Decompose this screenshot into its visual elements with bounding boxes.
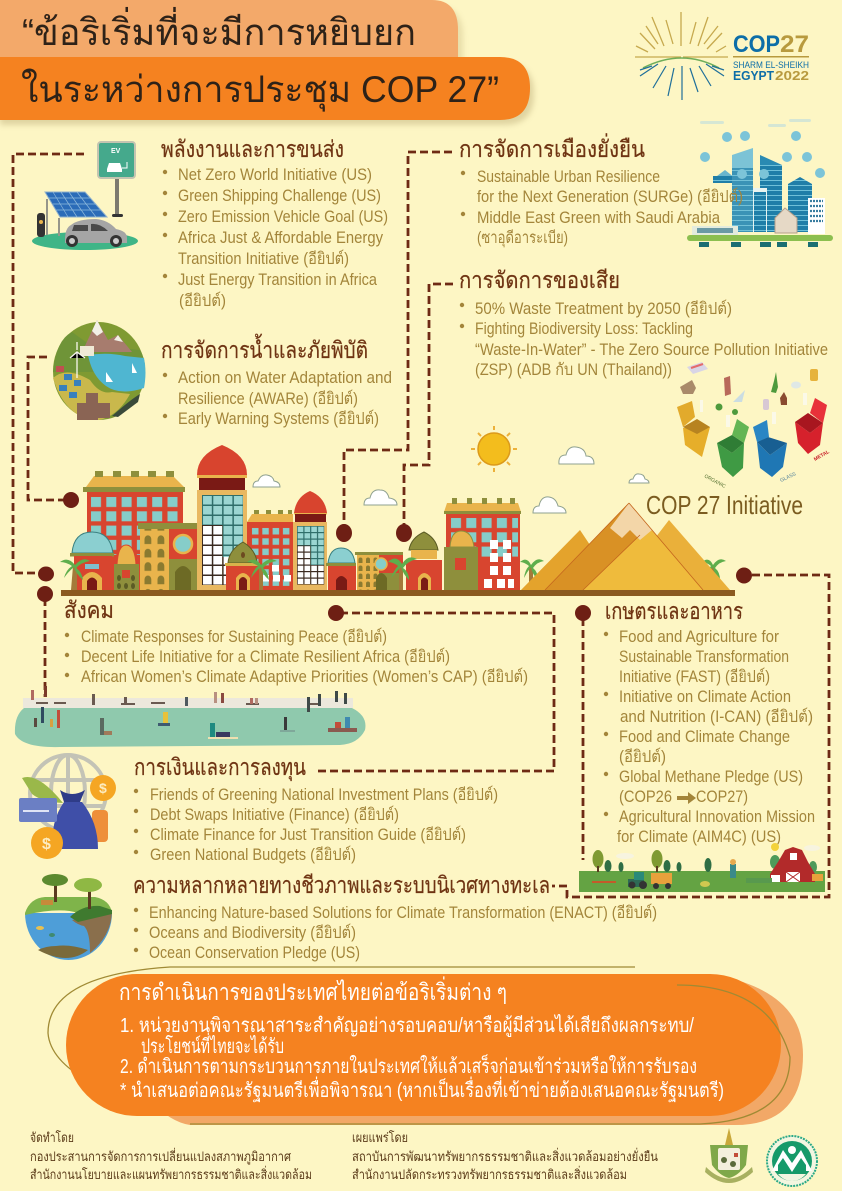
footer: published by: สำนักงานปลัดกระทรวงทรัพยากรธรรมชาติและสิ่งแวดล้อม [352, 1166, 627, 1182]
bullet list: agriculture: Global Methane Pledge (US) [619, 768, 803, 786]
bullet list: biodiversity: Oceans and Biodiversity (อียิปต์) [149, 923, 356, 942]
heading: agriculture: เกษตรและอาหาร [605, 598, 743, 624]
bullet list: agriculture [604, 628, 815, 846]
connector: urban [344, 152, 452, 526]
bullet list: energy: (อียิปต์) [179, 291, 226, 310]
bullet list: waste [460, 299, 828, 379]
logo: green circle [767, 1136, 817, 1186]
connector: agriculture [582, 618, 584, 860]
logo: COP27: SHARM EL-SHEIKH [733, 60, 809, 70]
bullet list: agriculture: Food and Agriculture for [619, 628, 779, 646]
node: agriculture [575, 605, 591, 621]
bullet list: finance: Green National Budgets (อียิปต์) [150, 845, 356, 864]
bullet list: society: African Women’s Climate Adaptive Priorities (Women’s CAP) (อียิปต์) [81, 667, 528, 686]
panel: Thailand actions [48, 967, 803, 1125]
upper promenade figures [31, 686, 347, 712]
panel: biodiversity [133, 872, 657, 962]
text block: actions [120, 1014, 724, 1102]
footer: prepared by [30, 1130, 312, 1182]
panel: agriculture and food [604, 598, 815, 846]
yellow bin [677, 401, 710, 457]
connector: biodiversity [552, 575, 829, 897]
bullet list: finance: Climate Finance for Just Transition Guide (อียิปต์) [150, 825, 466, 844]
connector: society [44, 598, 46, 697]
ground [61, 590, 735, 596]
pyramids [521, 503, 730, 590]
green bin [703, 419, 749, 490]
bullet list: biodiversity: Ocean Conservation Pledge (US) [149, 944, 360, 962]
heading: finance: การเงินและการลงทุน [134, 754, 306, 781]
bullet list: energy: Transition Initiative (อียิปต์) [178, 249, 349, 268]
building: small dome mosque [225, 542, 260, 590]
heading: energy: พลังงานและการขนส่ง [161, 136, 344, 162]
icon: EV solar charger: EV [111, 148, 121, 155]
bullet list: water: Action on Water Adaptation and [178, 369, 392, 387]
panel: society [64, 597, 528, 686]
illustration: people in park [15, 686, 365, 747]
connector: water [28, 357, 64, 500]
illustration: sun [471, 426, 517, 472]
red bin [795, 398, 831, 463]
icon: biodiversity globe [25, 874, 112, 960]
node: society [37, 586, 53, 602]
bullet list: agriculture: Initiative on Climate Action [619, 688, 791, 706]
building: teal domed tower [293, 491, 327, 590]
icon: smart city [687, 119, 833, 247]
bullet list: urban: Middle East Green with Saudi Arabia [477, 209, 721, 227]
bullet list: waste: (ZSP) (ADB กับ UN (Thailand)) [475, 361, 672, 379]
blue bin [753, 420, 798, 484]
palms [60, 557, 726, 590]
node: urban [336, 524, 352, 542]
bullet list: society: Climate Responses for Sustaining Peace (อียิปต์) [81, 627, 387, 646]
red bin: METAL [813, 449, 831, 463]
node: waste [396, 524, 412, 542]
connector: finance [317, 613, 554, 771]
building: olive mosque [406, 532, 442, 590]
logo: COP27: COP [733, 31, 780, 58]
panel: finance [134, 754, 498, 864]
falling waste [680, 362, 818, 427]
bullet list: finance [134, 785, 498, 864]
building: left domes [70, 532, 139, 590]
heading: waste: การจัดการของเสีย [459, 267, 620, 293]
bullet list: urban: (ซาอุดีอาระเบีย) [477, 229, 568, 248]
text block: actions: ประโยชน์ที่ไทยจะได้รับ [141, 1032, 284, 1058]
icon: finance globe and money bag: $ [99, 780, 107, 796]
lawn figures [34, 707, 357, 739]
label: COP 27 Initiative: COP 27 Initiative [646, 490, 803, 520]
bullet list: finance: Debt Swaps Initiative (Finance) (อียิปต์) [150, 805, 399, 824]
illustration: farm [579, 843, 825, 892]
footer: published by: สถาบันการพัฒนาทรัพยากรธรรมชาติและสิ่งแวดล้อมอย่างยั่งยืน [352, 1148, 658, 1164]
text block: actions: * นำเสนอต่อคณะรัฐมนตรีเพื่อพิจารณา (หากเป็นเรื่องที่เข้าข่ายต้องเสนอคณะรัฐมนตรี) [120, 1076, 724, 1102]
node: energy [38, 566, 54, 582]
text block: actions: 1. หน่วยงานพิจารณาสาระสำคัญอย่างรอบคอบ/หารือผู้มีส่วนได้เสียถึงผลกระทบ/ [120, 1014, 694, 1038]
building: tall domed tower [197, 445, 247, 590]
heading: society: สังคม [64, 597, 114, 623]
title banner: “ข้อริเริ่มที่จะมีการหยิบยก [22, 6, 416, 53]
footer: prepared by: สำนักงานนโยบายและแผนทรัพยากรธรรมชาติและสิ่งแวดล้อม [30, 1166, 312, 1182]
bullet list: society: Decent Life Initiative for a Climate Resilient Africa (อียิปต์) [81, 647, 450, 666]
bullet list: energy: Zero Emission Vehicle Goal (US) [178, 208, 388, 226]
connector: energy [13, 154, 84, 573]
bullet list: urban: for the Next Generation (SURGe) (อียิปต์) [477, 187, 743, 206]
connector: waste [404, 284, 453, 526]
illustration: clouds [253, 447, 649, 513]
title banner: ในระหว่างการประชุม COP 27” [21, 68, 499, 112]
heading: actions: การดำเนินการของประเทศไทยต่อข้อริเริ่มต่าง ๆ [119, 976, 507, 1005]
bullet list: energy: Just Energy Transition in Africa [178, 271, 378, 289]
footer: prepared by: กองประสานการจัดการการเปลี่ยนแปลงสภาพภูมิอากาศ [30, 1148, 292, 1165]
bullet list: water: Early Warning Systems (อียิปต์) [178, 409, 379, 428]
building: red grid block [247, 510, 293, 590]
footer: published by: เผยแพร่โดย [352, 1130, 408, 1145]
icon: water landscape [53, 320, 146, 420]
panel: energy and transport [161, 136, 388, 310]
building: centre low block [326, 548, 403, 590]
bullet list: waste: 50% Waste Treatment by 2050 (อียิปต์) [475, 299, 732, 318]
node: finance [328, 605, 344, 621]
bullet list: water: Resilience (AWARe) (อียิปต์) [178, 389, 358, 408]
bullet list: waste: Fighting Biodiversity Loss: Tackling [475, 320, 693, 338]
bullet list: agriculture: COP27) [696, 788, 748, 806]
bullet list: agriculture: Sustainable Transformation [619, 648, 789, 666]
logo: COP27: 27 [780, 31, 809, 58]
bullet list: energy [163, 166, 388, 310]
heading: biodiversity: ความหลากหลายทางชีวภาพและระบบนิเวศทางทะเล [133, 872, 550, 898]
panel: waste management [459, 267, 828, 379]
panel: water and disaster [161, 334, 392, 428]
bullet list: agriculture: (COP26 [619, 788, 672, 806]
icon: recycling bins [677, 362, 831, 490]
bullet list: agriculture: and Nutrition (I-CAN) (อียิปต์) [620, 707, 813, 726]
logo: COP27: EGYPT [733, 69, 774, 83]
heading: water: การจัดการน้ำและภัยพิบัติ [161, 334, 368, 363]
bullet list: energy: Net Zero World Initiative (US) [178, 166, 372, 184]
building: yellow arch block [138, 523, 197, 590]
bullet list: agriculture: Agricultural Innovation Mission [619, 808, 815, 826]
logo: COP27: 2022 [775, 69, 809, 83]
building: right red block [444, 498, 521, 590]
icon: finance globe and money bag [19, 755, 116, 859]
bullet list: agriculture: (อียิปต์) [619, 747, 666, 766]
footer: published by [352, 1130, 658, 1182]
building: red block [83, 471, 185, 590]
callout shape [48, 967, 803, 1125]
bullet list: agriculture: Food and Climate Change [619, 728, 790, 746]
bullet list: biodiversity: Enhancing Nature-based Solutions for Climate Transformation (ENACT) (อียิปต์) [149, 903, 657, 922]
bullet list: society [65, 627, 528, 686]
blue bin: GLASS [779, 471, 798, 484]
bullet list: energy: Africa Just & Affordable Energy [178, 229, 384, 247]
bullet list: urban: Sustainable Urban Resilience [477, 168, 660, 186]
logo: COP27 [635, 12, 809, 100]
bullet list: biodiversity [134, 903, 657, 962]
icon: finance globe and money bag: $ [42, 836, 51, 853]
title banner [0, 0, 534, 125]
panel: urban management [459, 133, 743, 248]
bullet list: energy: Green Shipping Challenge (US) [178, 187, 381, 205]
heading: urban: การจัดการเมืองยั่งยืน [459, 133, 645, 162]
text block: actions: 2. ดำเนินการตามกระบวนการภายในประเทศให้แล้วเสร็จก่อนเข้าร่วมหรือให้การรับรอง [120, 1053, 697, 1078]
green bin: ORGANIC [703, 473, 727, 490]
bullet list: agriculture: for Climate (AIM4C) (US) [617, 828, 781, 846]
bullet list: water [163, 369, 392, 428]
bullet list: agriculture: Initiative (FAST) (อียิปต์) [619, 667, 770, 686]
node: biodiversity [736, 568, 752, 584]
bullet list: finance: Friends of Greening National Investment Plans (อียิปต์) [150, 785, 498, 804]
node: water [63, 492, 79, 508]
logo: ministry emblem [705, 1128, 753, 1183]
bullet list: urban [461, 168, 743, 248]
icon: EV solar charger [32, 142, 138, 250]
illustration: city skyline [60, 445, 735, 596]
footer: prepared by: จัดทำโดย [30, 1130, 74, 1145]
